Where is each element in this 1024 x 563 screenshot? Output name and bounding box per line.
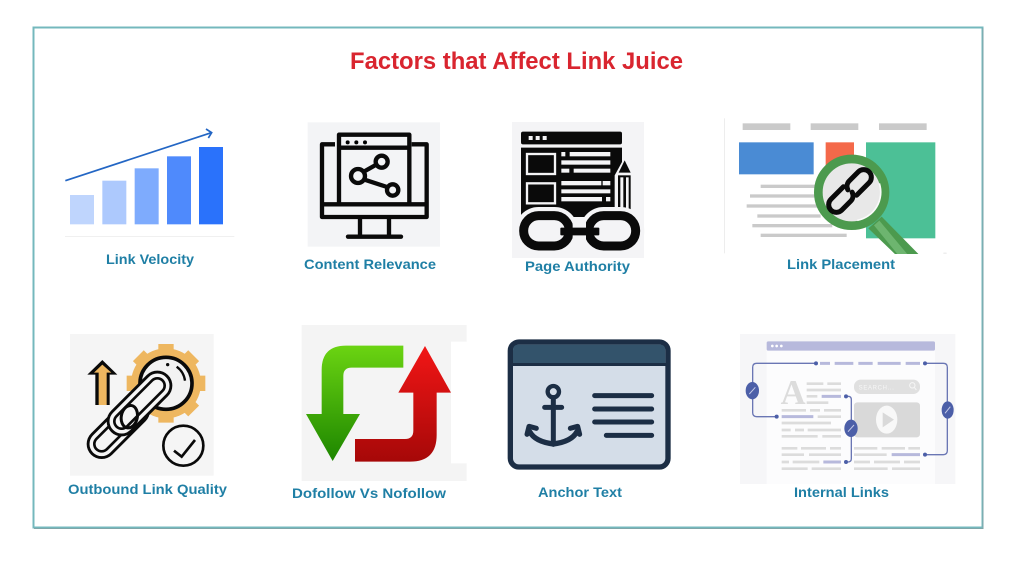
label: outbound link quality: Outbound Link Quality (68, 481, 227, 497)
icon: page with chain (512, 122, 644, 258)
icon: page wireframe with linked nodes: SEARCH... (859, 385, 895, 391)
label: anchor text: Anchor Text (538, 484, 622, 500)
label: internal links: Internal Links (794, 484, 889, 500)
label: link velocity: Link Velocity (106, 251, 194, 267)
icon: rising bar chart (65, 129, 234, 237)
icon: page layout with magnifier (724, 118, 947, 257)
icon: monitor with share symbol (308, 122, 440, 247)
icon: green and red arrows (302, 325, 468, 481)
panel: outbound link quality (68, 334, 227, 497)
icon: chain with gear and check (70, 334, 214, 476)
label: link placement: Link Placement (787, 256, 895, 272)
panel: anchor text (510, 342, 668, 500)
panel: link placement (724, 118, 947, 272)
panel: dofollow vs nofollow (292, 325, 468, 501)
label: dofollow vs nofollow: Dofollow Vs Nofollow (292, 485, 446, 501)
label: page authority: Page Authority (525, 258, 630, 274)
panel: link velocity (65, 129, 234, 267)
label: content relevance: Content Relevance (304, 256, 436, 272)
panel: internal links (740, 334, 955, 500)
icon: browser window with anchor (510, 342, 668, 467)
icon: page wireframe with linked nodes (740, 334, 955, 484)
panel: content relevance (304, 122, 440, 272)
title: Factors that Affect Link Juice (350, 48, 683, 75)
panel: page authority (512, 122, 644, 274)
icon: page wireframe with linked nodes: A (781, 374, 806, 412)
